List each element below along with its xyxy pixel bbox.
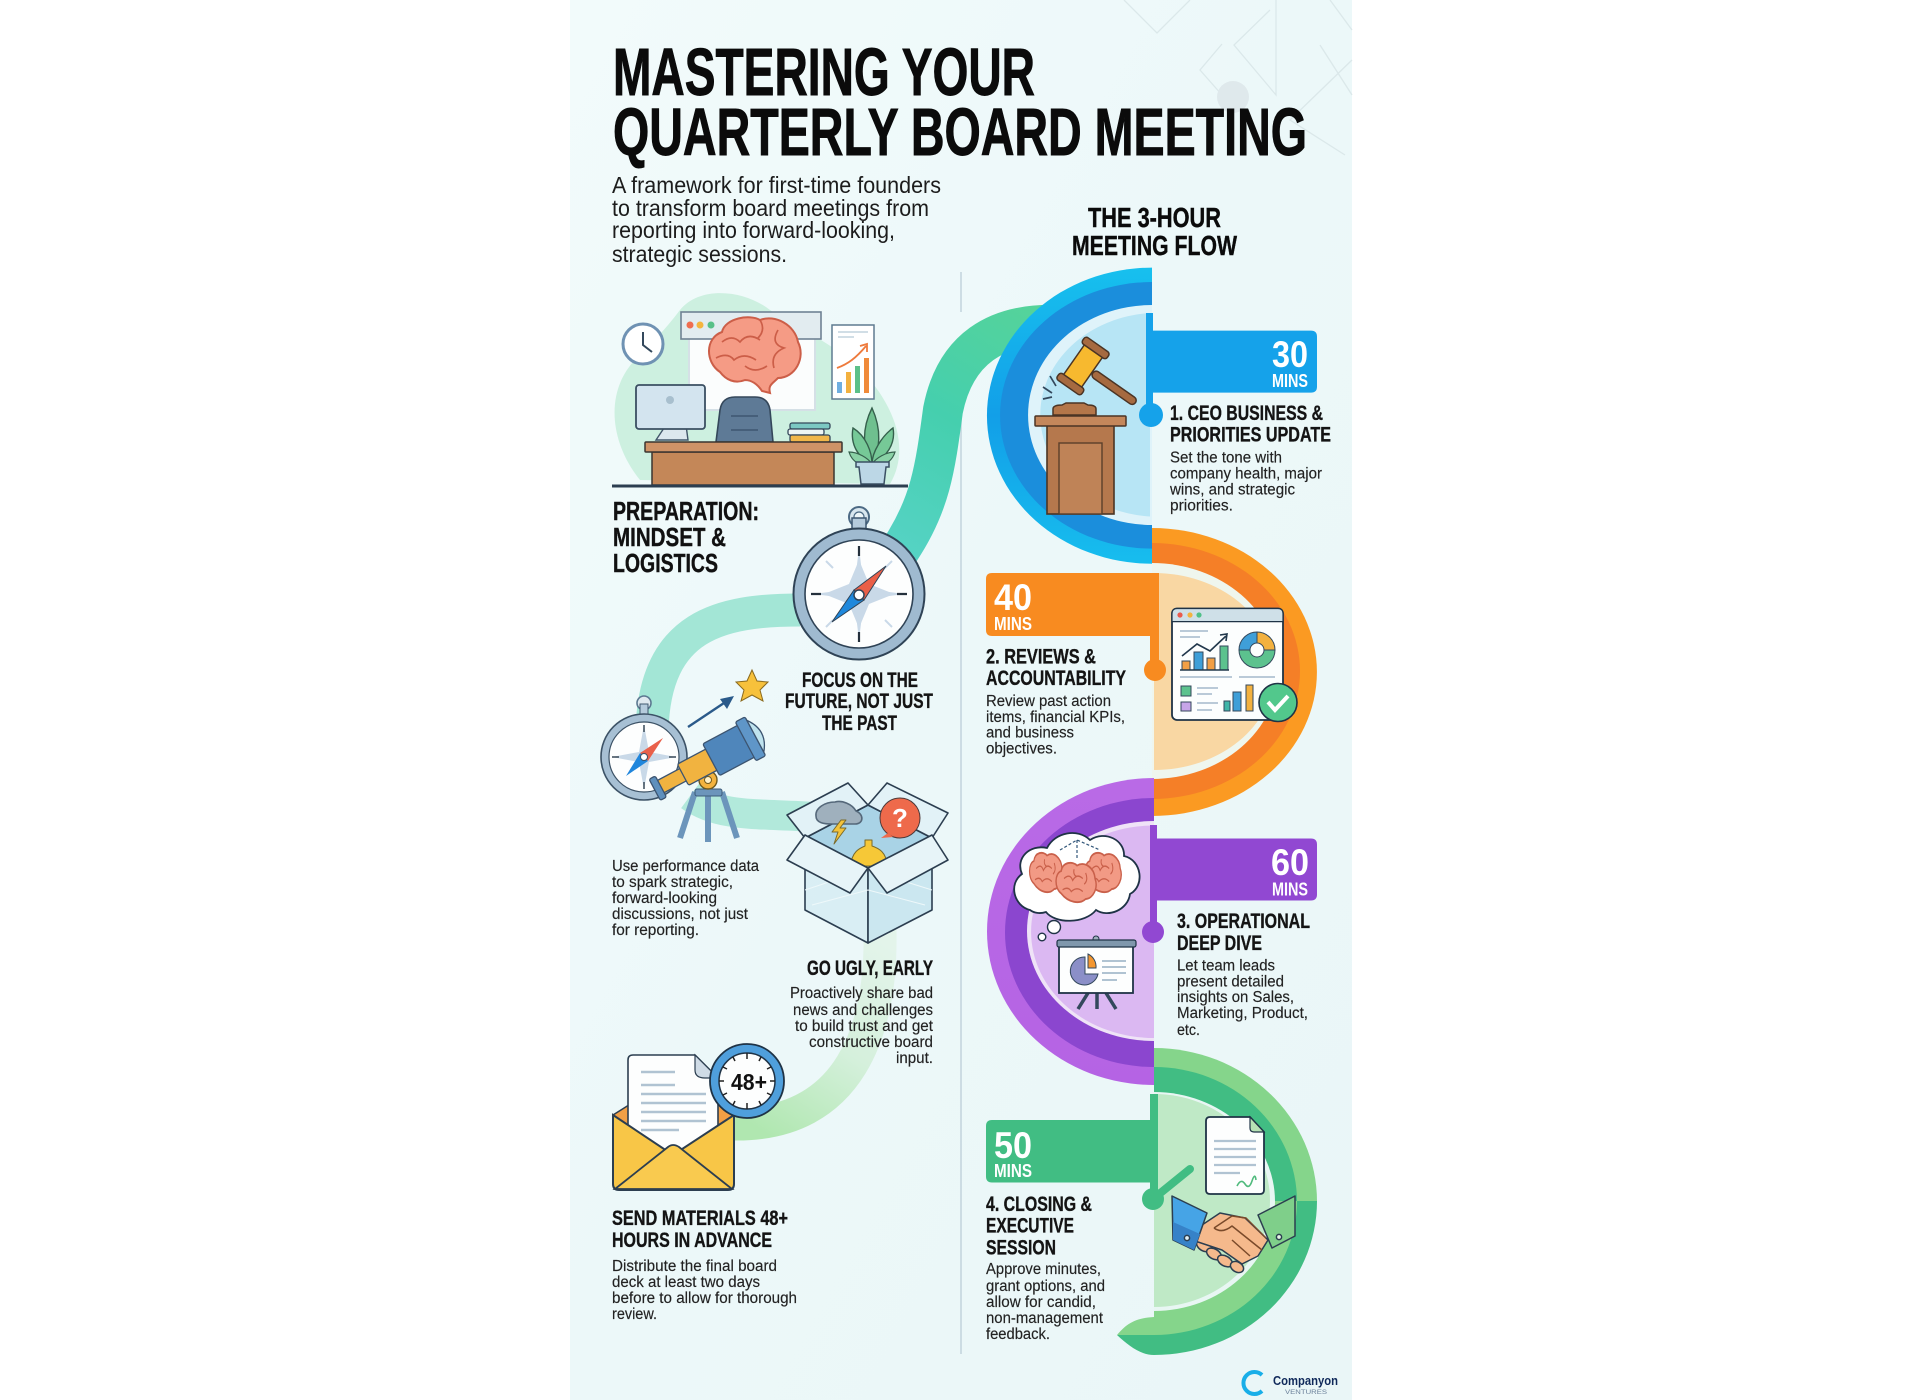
arc: blue <box>987 268 1152 564</box>
panel: step 2 reviews <box>986 528 1317 816</box>
text: send materials: deck at least two days <box>612 1274 760 1291</box>
text: step 3 <box>1177 909 1310 1039</box>
text: step 3: etc. <box>1177 1022 1200 1039</box>
heading: the 3-hour meeting flow <box>1072 202 1237 261</box>
text: go ugly, early: news and challenges <box>793 1002 933 1019</box>
text: go ugly, early <box>790 956 934 1067</box>
background panel <box>570 0 1352 1400</box>
illustration: desk scene <box>612 293 908 486</box>
text: use performance data: Use performance data <box>612 858 759 875</box>
text: send materials <box>612 1206 797 1323</box>
text: step 4: EXECUTIVE <box>986 1214 1074 1238</box>
panel: step 1 CEO update <box>987 268 1331 564</box>
text: step 2: ACCOUNTABILITY <box>986 666 1126 690</box>
arc: green <box>1117 1048 1317 1355</box>
text: step 2: and business <box>986 724 1074 742</box>
text: step 3: insights on Sales, <box>1177 989 1294 1006</box>
time tag: 30 mins: MINS <box>1272 371 1308 391</box>
text: go ugly, early: to build trust and get <box>795 1018 934 1035</box>
label: focus on the future <box>785 668 933 735</box>
text: step 1: wins, and strategic <box>1169 482 1295 498</box>
icon: presentation board <box>1057 936 1136 1009</box>
text: step 1: PRIORITIES UPDATE <box>1170 422 1331 446</box>
browser window <box>681 312 821 410</box>
title <box>613 35 1307 170</box>
logo: companyon ventures <box>1243 1372 1338 1396</box>
arc: orange <box>1152 528 1317 816</box>
connecting ribbon: preparation path <box>652 325 1060 1124</box>
text: send materials: review. <box>612 1306 657 1323</box>
time tag: 60 mins: MINS <box>1272 880 1308 900</box>
icon: handshake <box>1172 1196 1295 1275</box>
text: step 1: 1. CEO BUSINESS & <box>1170 401 1323 425</box>
text: step 3: Marketing, Product, <box>1177 1005 1308 1022</box>
books <box>788 423 830 442</box>
arc: purple <box>987 778 1154 1085</box>
subtitle: reporting into forward-looking, <box>612 217 895 243</box>
icon: large compass <box>794 507 924 660</box>
text: go ugly, early: input. <box>896 1050 933 1067</box>
subtitle: A framework for first-time founders <box>612 172 941 198</box>
logo: companyon ventures: Companyon <box>1273 1373 1338 1388</box>
icon: open box <box>787 783 948 943</box>
time tag: 40 mins: 40 <box>994 577 1032 618</box>
label: focus on the future: THE PAST <box>822 711 897 735</box>
text: use performance data: forward-looking <box>612 890 717 907</box>
icon: open box: ? <box>892 803 908 833</box>
text: step 2: items, financial KPIs, <box>986 709 1125 726</box>
heading: preparation: LOGISTICS <box>613 550 718 578</box>
heading: preparation: MINDSET & <box>613 524 726 552</box>
text: step 3: DEEP DIVE <box>1177 931 1262 955</box>
desk <box>645 442 842 485</box>
text: step 3: 3. OPERATIONAL <box>1177 909 1310 933</box>
time tag: 40 mins: MINS <box>994 614 1032 634</box>
time tag: 50 mins <box>986 1094 1190 1210</box>
heading: the 3-hour meeting flow: MEETING FLOW <box>1072 230 1237 261</box>
text: step 3: Let team leads <box>1177 958 1275 974</box>
text: step 1 <box>1169 401 1331 514</box>
title: MASTERING YOUR <box>613 35 1035 110</box>
time tag: 40 mins <box>986 573 1166 681</box>
text: use performance data <box>612 858 759 939</box>
icon: envelope with 48+ clock: 48+ <box>731 1069 767 1095</box>
subtitle <box>612 172 941 267</box>
icon: signed document <box>1206 1117 1264 1194</box>
logo: companyon ventures: VENTURES <box>1285 1389 1328 1396</box>
text: step 4: 4. CLOSING & <box>986 1192 1092 1216</box>
icon: envelope with 48+ clock <box>613 1044 784 1190</box>
text: go ugly, early: GO UGLY, EARLY <box>807 956 933 980</box>
text: step 2: objectives. <box>986 740 1057 758</box>
time tag: 30 mins: 30 <box>1272 334 1308 375</box>
title: QUARTERLY BOARD MEETING <box>613 95 1307 170</box>
icon: gavel and podium <box>1035 336 1150 514</box>
panel: step 3 deep dive <box>987 778 1317 1085</box>
text: step 4: feedback. <box>986 1326 1050 1343</box>
text: send materials: HOURS IN ADVANCE <box>612 1228 772 1252</box>
icon: dashboard <box>1172 608 1297 722</box>
text: use performance data: for reporting. <box>612 922 699 939</box>
text: step 2: Review past action <box>986 693 1111 710</box>
text: send materials: SEND MATERIALS 48+ <box>612 1206 788 1230</box>
text: step 4 <box>986 1192 1105 1343</box>
icon: brain <box>709 317 801 393</box>
subtitle: strategic sessions. <box>612 241 787 267</box>
text: step 4: Approve minutes, <box>986 1261 1101 1278</box>
heading: preparation: PREPARATION: <box>613 498 759 526</box>
heading: preparation <box>613 498 759 578</box>
text: step 1: Set the tone with <box>1170 450 1282 466</box>
text: send materials: Distribute the final board <box>612 1258 777 1275</box>
text: step 1: company health, major <box>1170 466 1322 482</box>
text: step 2: 2. REVIEWS & <box>986 644 1096 668</box>
monitor <box>636 385 705 440</box>
time tag: 50 mins: 50 <box>994 1125 1032 1166</box>
label: focus on the future: FUTURE, NOT JUST <box>785 689 933 713</box>
icon: wall clock <box>623 324 663 364</box>
time tag: 50 mins: MINS <box>994 1161 1032 1181</box>
subtitle: to transform board meetings from <box>612 195 929 221</box>
time tag: 30 mins <box>1139 313 1317 427</box>
text: step 1: priorities. <box>1170 498 1233 514</box>
icon: telescope and star <box>644 670 772 842</box>
chart card <box>832 325 874 399</box>
text: step 3: present detailed <box>1177 974 1284 990</box>
text: go ugly, early: Proactively share bad <box>790 985 933 1002</box>
plant <box>849 408 895 484</box>
icon: small compass <box>601 696 687 800</box>
chair <box>716 397 773 442</box>
label: focus on the future: FOCUS ON THE <box>802 668 918 692</box>
text: send materials: before to allow for thorough <box>612 1290 797 1307</box>
time tag: 60 mins: 60 <box>1271 842 1309 883</box>
text: step 4: allow for candid, <box>986 1294 1096 1311</box>
icon: thought cloud with brains <box>1014 833 1140 941</box>
heading: the 3-hour meeting flow: THE 3-HOUR <box>1088 202 1221 233</box>
text: step 4: grant options, and <box>986 1278 1105 1295</box>
text: use performance data: discussions, not just <box>612 906 749 923</box>
panel: step 4 closing <box>986 1048 1317 1355</box>
time tag: 60 mins <box>1142 825 1317 943</box>
text: go ugly, early: constructive board <box>809 1034 933 1051</box>
text: use performance data: to spark strategic, <box>612 874 733 891</box>
text: step 2 <box>986 644 1126 758</box>
text: step 4: SESSION <box>986 1236 1056 1260</box>
text: step 4: non-management <box>986 1310 1104 1327</box>
